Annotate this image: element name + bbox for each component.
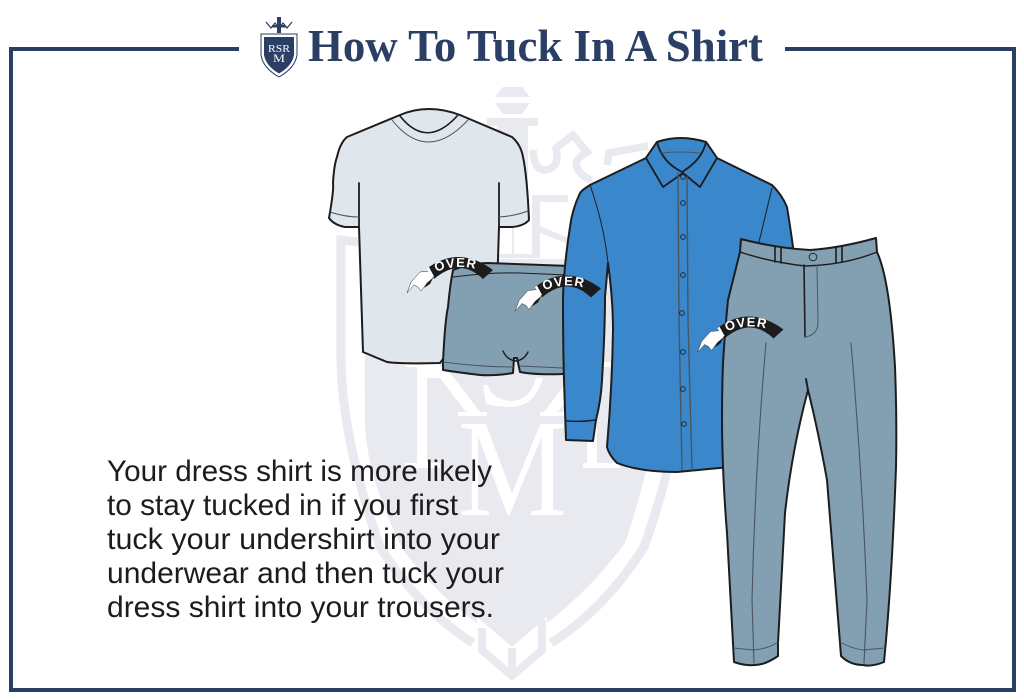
ribbon (537, 275, 601, 298)
underwear hems (443, 362, 563, 368)
watermark: crest (341, 87, 683, 676)
watermark: shield pendant (482, 620, 542, 676)
label: OVER (542, 276, 584, 290)
icon: RSM crest logo (261, 17, 297, 77)
title: logo and heading (261, 17, 764, 77)
text block: explanation: Your dress shirt is more likely (107, 455, 492, 488)
icon: pointing hand (407, 271, 433, 293)
undershirt cuffs (330, 211, 528, 217)
watermark: white monogram M: M (458, 392, 567, 546)
text block: explanation: dress shirt into your trousers. (107, 591, 494, 624)
icon: pointing hand (515, 290, 541, 312)
trousers cuffs (734, 642, 885, 650)
shirt cuff (567, 420, 596, 421)
watermark: crown scrolls (533, 135, 648, 180)
ribbon (429, 257, 493, 279)
shirt collar (646, 142, 717, 187)
arrow badge: over, shirt into trousers (697, 316, 784, 352)
trousers creases (752, 343, 867, 663)
underwear crotch seam (503, 351, 528, 361)
watermark: shield fill (364, 259, 662, 647)
undershirt sleeve seams (359, 183, 499, 227)
text block: explanation: underwear and then tuck your (107, 557, 504, 590)
trousers belt loops (775, 246, 842, 263)
shirt sleeve seams (590, 185, 772, 263)
label: OVER (725, 318, 766, 330)
arrow badge: over, undershirt into underwear (406, 257, 493, 293)
garment: underwear (443, 263, 570, 375)
watermark: upper letters (498, 195, 568, 258)
underwear waistband (453, 273, 567, 277)
watermark: shield outline (341, 240, 683, 643)
label: OVER (434, 258, 476, 271)
ribbon (720, 316, 784, 338)
undershirt collar (400, 115, 458, 133)
trousers fly (804, 265, 805, 337)
heading: How To Tuck In A Shirt (308, 20, 764, 71)
garment: undershirt (329, 109, 529, 363)
text block: explanation: tuck your undershirt into your (107, 523, 500, 556)
shirt buttons (680, 175, 686, 426)
icon: RSM crest logo: M (273, 51, 285, 65)
icon: pointing hand (698, 330, 724, 352)
watermark: crest post (487, 87, 538, 188)
trousers button (809, 253, 817, 261)
text block: explanation (107, 455, 504, 624)
icon: RSM crest logo: RSR (268, 43, 291, 55)
trousers waistband (740, 252, 877, 266)
text block: explanation: to stay tucked in if you first (107, 489, 458, 522)
garment: trousers (722, 238, 896, 666)
arrow badge: over, underwear into shirt (514, 276, 601, 312)
watermark: white monogram RSR (405, 362, 620, 468)
garment: dress shirt (563, 138, 793, 472)
shirt placket (678, 173, 692, 470)
